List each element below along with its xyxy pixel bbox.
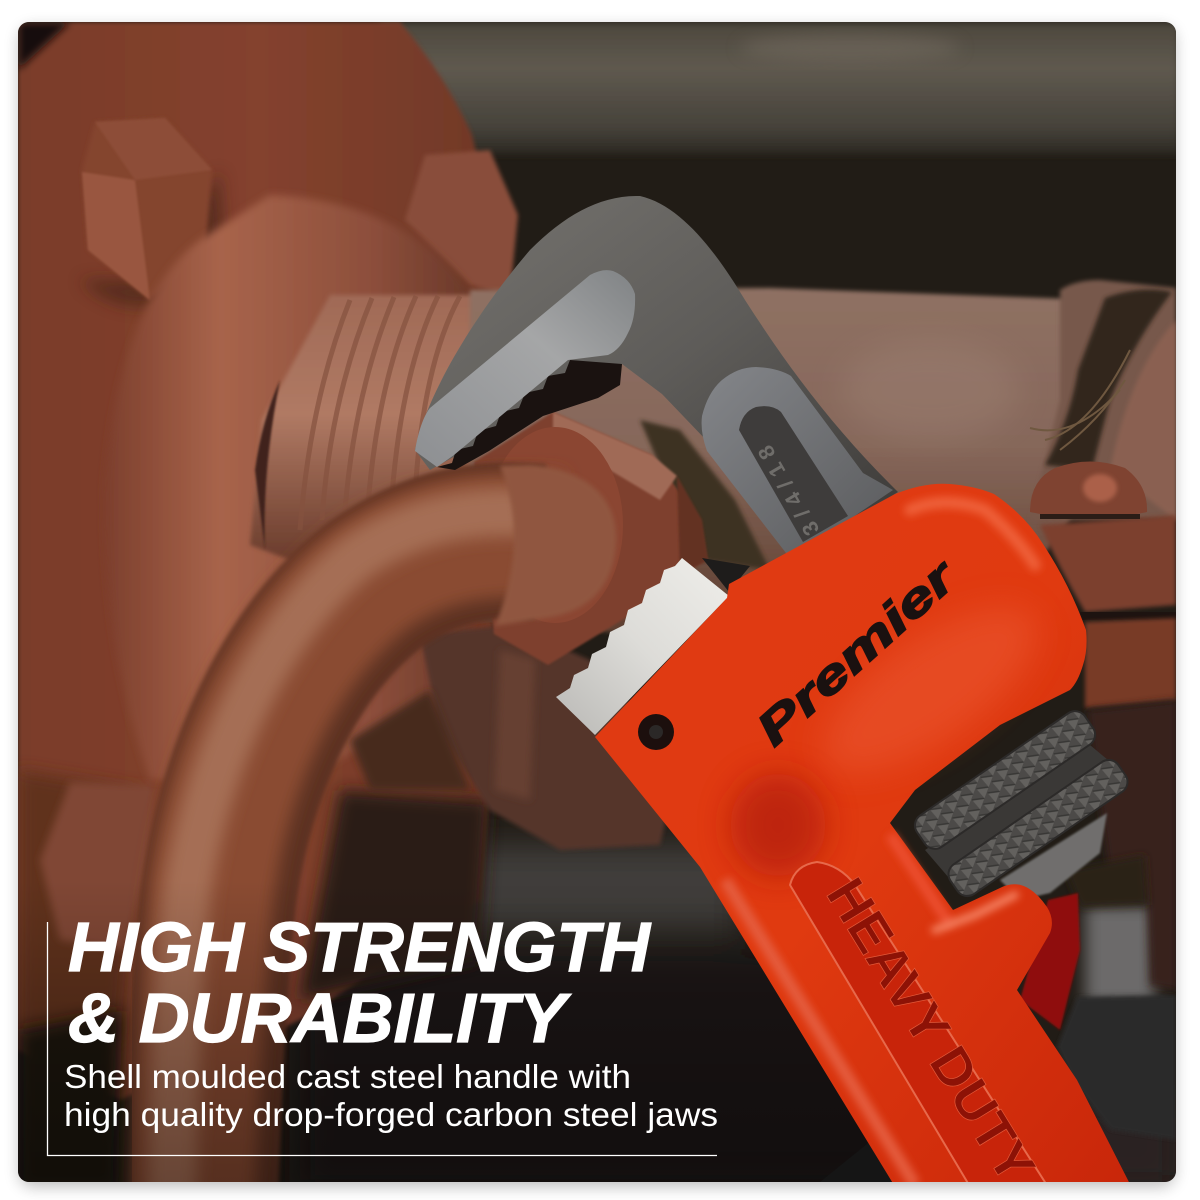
handle recessed channel [790, 862, 1050, 1190]
head crown highlight [910, 502, 1035, 565]
heading: HIGH STRENGTH [68, 908, 651, 986]
handle rib highlight [890, 835, 950, 925]
lower pipe fitting [350, 625, 680, 850]
claw highlight [935, 895, 1015, 930]
text scrim [18, 916, 868, 1182]
callout frame lines [48, 922, 717, 1156]
main horizontal pipe [470, 288, 1100, 640]
description text: Shell moulded cast steel handle with [64, 1058, 631, 1095]
description text: high quality drop-forged carbon steel jaws [64, 1096, 718, 1133]
stamped slot [739, 406, 848, 542]
bolt: lower left [40, 782, 155, 950]
red wrench body [595, 484, 1133, 1193]
right rusted clamp [1040, 515, 1180, 990]
pipe end thread [495, 465, 616, 626]
pipe grime patch [859, 359, 1001, 428]
adjusting screw hole [638, 714, 674, 750]
description text [64, 1058, 718, 1133]
knurled adjusting nut [910, 706, 1132, 901]
handle lower edge highlight [725, 880, 915, 1185]
machined slot surround [702, 367, 893, 553]
bolt: top centre [405, 150, 518, 295]
right collar and rope [1030, 280, 1176, 520]
embossed handle text: HEAVY DUTY [815, 868, 1046, 1193]
background: upper pipe [380, 22, 1180, 154]
heading [68, 908, 651, 1057]
head dark hollow [730, 773, 826, 877]
bolt: top left [80, 118, 225, 307]
jaw teeth [437, 360, 622, 470]
lower jaw white steel [556, 558, 729, 735]
threaded pipe section [248, 293, 472, 560]
machined jaw face [415, 270, 635, 467]
brand wordmark: Premier [746, 549, 967, 755]
jaw casting [415, 196, 898, 516]
rope fibres behind jaw [640, 420, 770, 570]
curved copper pipe [172, 512, 560, 1200]
hex nut [474, 412, 708, 665]
background: floor haze [478, 833, 1176, 1182]
stamped size marks: 3/4/18 [753, 441, 824, 540]
upper wrench jaw [415, 196, 898, 555]
domed rivet [1030, 462, 1147, 519]
head highlight [828, 609, 1033, 770]
glove [820, 995, 1176, 1182]
dark red back of wrench [1020, 893, 1080, 1030]
wrench shadow below jaw [702, 558, 750, 592]
grey background patch right [1085, 905, 1155, 1005]
flange hub [118, 194, 454, 781]
large flange [18, 22, 500, 1190]
heading: & DURABILITY [68, 979, 571, 1057]
grey spindle body [1000, 813, 1107, 900]
